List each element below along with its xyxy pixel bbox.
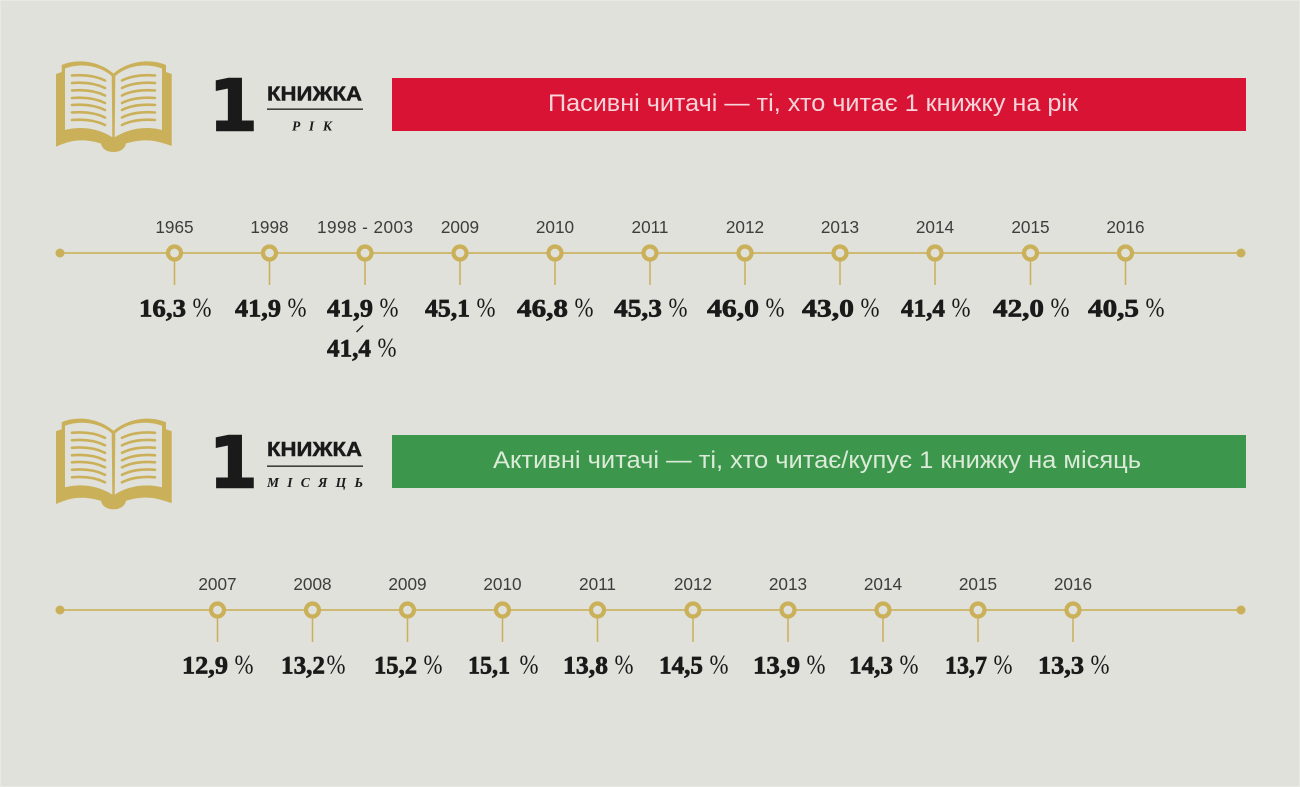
heading: 1 книжка / рік: КНИЖКА [267,84,362,106]
percentage values: 46,0 [707,294,759,322]
percentage values: % [900,650,918,680]
icon: open book (passive readers) [56,61,172,152]
year labels: 2007 [198,574,237,594]
percentage values: 14,5 [659,650,703,680]
heading: 1 книжка / рік: РІК [292,118,333,134]
year labels: 2009 [388,574,427,594]
percentage values: 13,9 [753,650,800,680]
percentage values: % [614,650,634,680]
year labels: 2011 [579,574,616,594]
percentage values: 41,9 [327,294,373,322]
percentage values: 45,3 [614,294,662,322]
percentage values: 13,3 [1038,650,1084,680]
year labels: 2009 [441,217,479,237]
year labels: 2012 [674,574,712,594]
year labels: 2010 [536,217,574,237]
icon: open book (active readers) [56,419,172,509]
percentage values: % [860,292,880,322]
percentage values: % [520,650,538,680]
percentage values: % [378,332,396,362]
percentage values: 16,3 [139,294,186,322]
percentage values: 12,9 [182,650,228,680]
banner: passive readers [392,78,1246,131]
percentage values: % [806,650,826,680]
percentage values: 14,3 [849,650,893,680]
timeline: passive readers [56,217,1246,362]
year labels: 2016 [1106,217,1145,237]
percentage values: 15,1 [468,650,510,680]
year labels: 2016 [1054,574,1092,594]
percentage values: % [668,292,688,322]
year labels: 1998 - 2003 [317,217,413,237]
percentage values: 13,8 [563,650,608,680]
year labels [155,217,1145,237]
percentage values: % [710,650,728,680]
timeline: active readers [56,574,1246,680]
percentage values: 43,0 [802,294,854,322]
percentage values: % [424,650,442,680]
banner: active readers: Активні читачі — ті, хто читає/купує 1 книжку на місяць [493,447,1141,474]
year labels: 2013 [769,574,807,594]
heading: 1 книжка / місяць: МІСЯЦЬ [266,475,363,490]
year labels: 2015 [959,574,997,594]
percentage values: % [1050,292,1070,322]
percentage values [182,650,1110,680]
percentage values: % [326,650,346,680]
percentage values: 15,2 [374,650,417,680]
percentage values: % [234,650,254,680]
percentage values: % [288,292,306,322]
year labels: 2014 [916,217,955,237]
year labels: 2015 [1011,217,1050,237]
year labels: 2014 [864,574,903,594]
year labels: 2013 [821,217,859,237]
percentage values: % [952,292,970,322]
heading: 1 книжка / місяць: КНИЖКА [267,439,362,461]
heading: 1 книжка / рік: 1 [208,64,258,147]
year labels: 1965 [155,217,194,237]
year labels: 2011 [632,217,668,237]
percentage values [139,292,1164,362]
percentage values: % [192,292,212,322]
percentage values: % [574,292,594,322]
percentage values: 41,4 [901,294,945,322]
percentage values: 45,1 [425,294,470,322]
year labels [198,574,1092,594]
heading: 1 книжка / рік [208,64,363,147]
percentage values: % [476,292,496,322]
heading: 1 книжка / місяць [208,421,363,504]
banner: active readers [392,435,1246,488]
banner: passive readers: Пасивні читачі — ті, хто читає 1 книжку на рік [548,90,1079,117]
year labels: 2010 [483,574,522,594]
percentage values: % [1146,292,1164,322]
percentage values: 41,9 [235,294,281,322]
percentage values: 41,4 [327,334,371,362]
percentage values: 42,0 [993,294,1044,322]
percentage values: 13,7 [945,650,987,680]
percentage values: % [380,292,398,322]
percentage values: % [766,292,784,322]
percentage values: % [1090,650,1110,680]
heading: 1 книжка / місяць: 1 [208,421,258,504]
percentage values: % [994,650,1012,680]
year labels: 1998 [250,217,289,237]
percentage values: 13,2 [281,650,325,680]
year labels: 2008 [293,574,332,594]
percentage values: 40,5 [1088,294,1139,322]
percentage values: 46,8 [517,294,568,322]
year labels: 2012 [726,217,764,237]
